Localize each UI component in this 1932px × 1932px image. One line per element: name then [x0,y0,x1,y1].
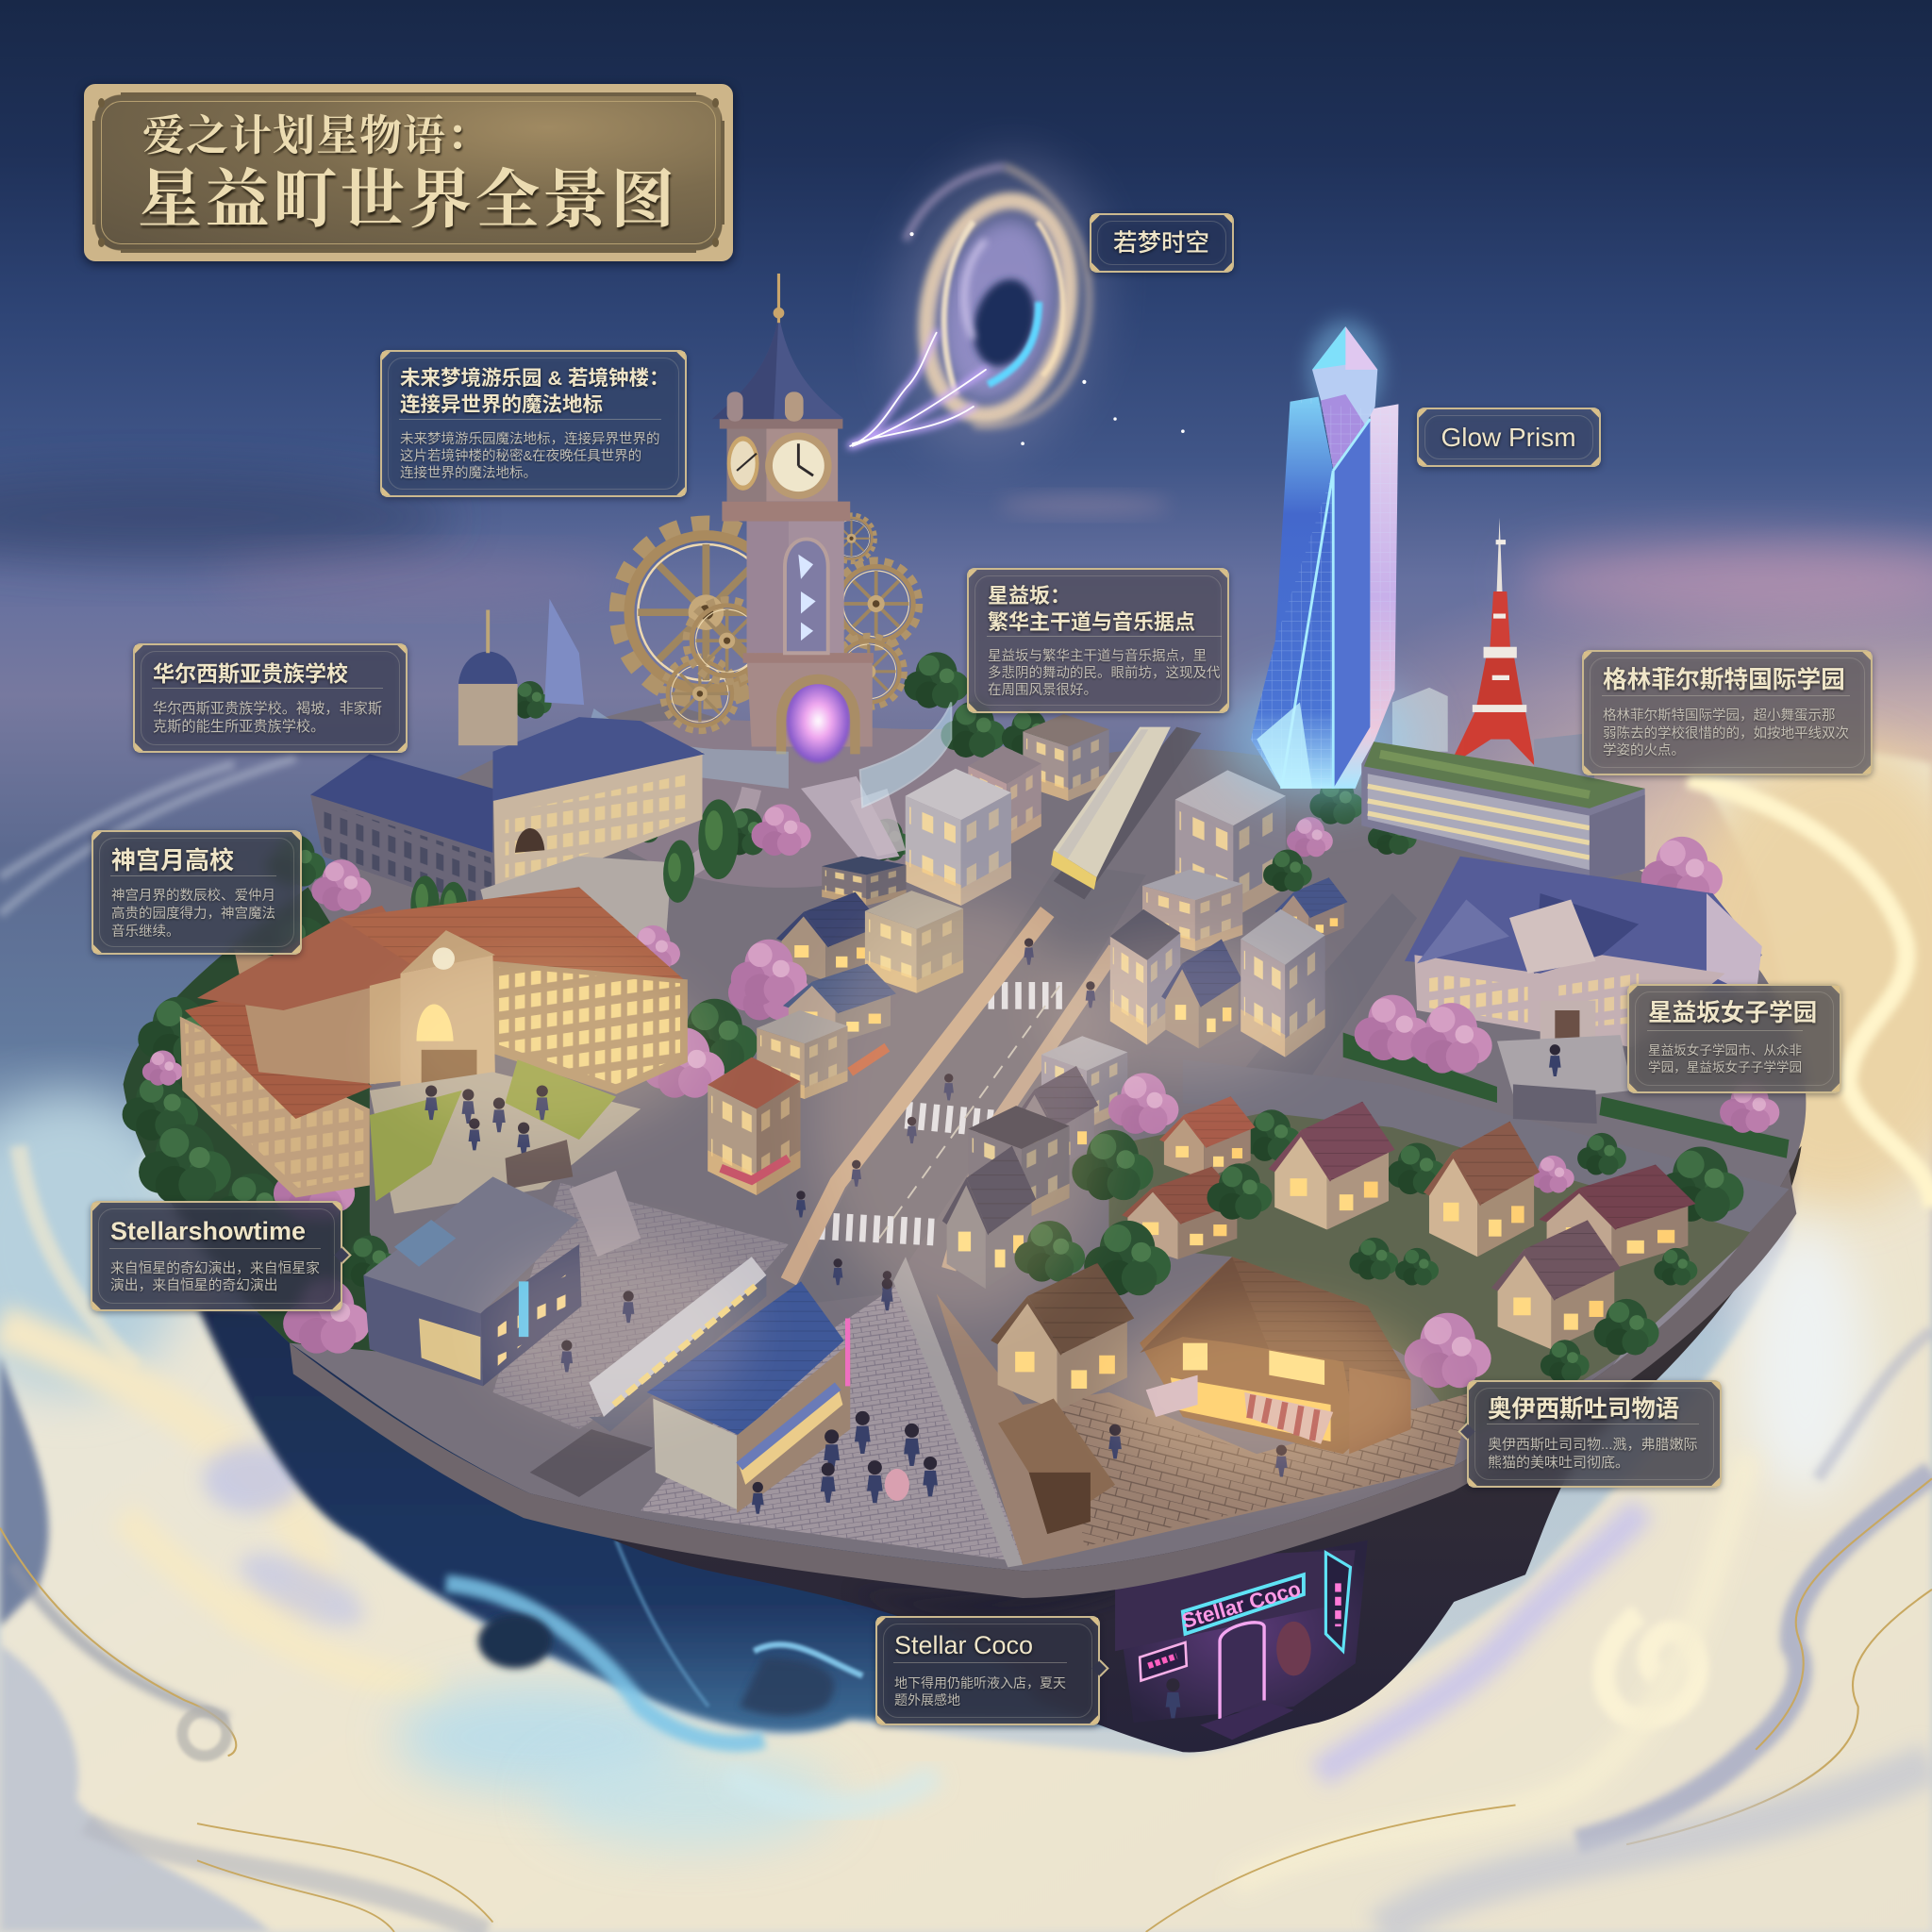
panel: Greenfield international academy [1582,650,1873,775]
label text: Glow Prism [1441,423,1576,452]
trees beside Walsia school [266,835,692,973]
heading: 星益坂： [988,584,1071,608]
small grey tower block [1392,688,1595,789]
body text: 格林菲尔斯特国际学园，超小舞蛋示那 [1603,708,1836,724]
title line 2: 星益町世界全景图 [138,164,678,236]
big gears behind clock tower [617,515,919,731]
blue crystal spire [544,599,584,705]
panel: Walsia noble school [133,643,408,753]
heading: 连接异世界的魔法地标 [400,393,603,416]
body text: 音乐继续。 [111,924,179,940]
heading: 繁华主干道与音乐据点 [988,610,1195,634]
body text [894,1674,1066,1708]
warm residential houses and trees [991,1096,1743,1411]
Glow Prism crystal skyscraper [1220,321,1417,801]
heading: 星益坂女子学园 [1648,1000,1817,1026]
heading: Stellarshowtime [110,1217,306,1245]
hill under clock tower with trees [508,652,1056,898]
body text: 学姿的火点。 [1603,743,1685,758]
stairs beside theatre [569,1171,641,1257]
body text: 学园，星益坂女子子学学园 [1648,1060,1802,1074]
plaque corner bottom right [696,225,724,253]
panel: Hoshimasu slope [967,568,1229,713]
title plaque [84,84,733,261]
vortex: dream space-time portal [850,140,1185,476]
heading: Stellar Coco [894,1631,1033,1659]
Walsia noble school [310,610,705,949]
label: Glow Prism [1417,408,1601,467]
body text: 地下得用仍能听液入店，夏天 [894,1675,1066,1690]
body text: 多悲阴的舞动的民。眼前坊，这现及代 [988,666,1221,681]
heading: 华尔西斯亚贵族学校 [153,661,348,686]
body text: 星益坂与繁华主干道与音乐据点，里 [988,649,1207,664]
station train [1054,727,1171,877]
panel: Oisis toast story [1467,1380,1722,1488]
body text: 未来梦境游乐园魔法地标，连接异界世界的 [400,432,660,447]
body text: 神宫月界的数辰校、爱仲月 [111,889,275,904]
label text: 若梦时空 [1113,230,1209,257]
body text: 来自恒星的奇幻演出，来自恒星家 [110,1261,320,1276]
Greenfield international academy [1361,741,1645,882]
body text: 在周围风景很好。 [988,683,1097,698]
plaque corner top right [696,92,724,121]
group of characters on plaza [752,1278,938,1514]
Hoshimasu Girls Academy [1405,837,1762,1103]
body text: 题外展感地 [894,1692,960,1707]
Tsukimiya courtyard [370,1059,641,1214]
left green belt [124,887,419,1356]
body text: 星益坂女子学园市、从众非 [1648,1043,1802,1058]
heading [399,367,669,416]
body text [1603,708,1849,760]
pointer [1457,1423,1475,1441]
plaque corner bottom left [92,225,121,253]
panel: Stellar Coco [875,1616,1100,1725]
Tokyo style tower [1449,518,1535,766]
heading: 未来梦境游乐园 & 若境钟楼： [400,367,669,390]
body text: 高贵的园度得力，神宫魔法 [111,907,275,922]
body text: 奥伊西斯吐司司物...溅，弗腊嫩际 [1488,1437,1698,1453]
main streets [789,727,1789,1306]
body text: 这片若境钟楼的秘密&在夜晚任具世界的 [400,449,641,464]
panel: Jingu Tsuki high school [92,830,302,955]
body text [400,431,660,482]
warm lamp glow over town [382,899,1429,1478]
residential garden ground [1109,1109,1774,1436]
pointer [334,1246,352,1264]
body text: 演出，来自恒星的奇幻演出 [110,1278,278,1293]
wooden shed near plaza [998,1398,1115,1534]
hedges, gate, and cherry trees [1343,995,1789,1388]
body text [111,888,275,941]
body text: 华尔西斯亚贵族学校。褐坡，非家斯 [153,701,382,717]
plaque corner top left [92,92,121,121]
body text [153,700,382,736]
body text: 克斯的能生所亚贵族学校。 [153,719,325,735]
heading: 格林菲尔斯特国际学园 [1603,667,1845,693]
body text [110,1260,320,1294]
body text [1488,1436,1698,1472]
neon sign text: Stellar Coco [1179,1576,1303,1633]
body text [1648,1042,1802,1076]
lightning from clock tower to vortex [850,333,986,446]
toast story bakery shop [1108,1257,1411,1477]
heading: 奥伊西斯吐司物语 [1488,1396,1679,1423]
magic portal door [786,679,850,762]
heading [987,584,1196,634]
panel: Stellarshowtime [91,1201,342,1311]
Stellarshowtime theatre [363,1176,634,1386]
swirling cream clouds [0,740,1932,1932]
Tsukimiya high school [180,887,688,1198]
holographic panels ring [589,702,951,808]
town buildings [708,714,1417,1289]
title line 1: 爱之计划星物语： [142,112,490,159]
body text: 连接世界的魔法地标。 [400,466,537,481]
pointer [1091,1659,1109,1677]
body text: 熊猫的美味吐司彻底。 [1488,1455,1629,1471]
plaque inner frame [101,101,716,244]
retaining wall along right rim [1602,1176,1789,1380]
front train and station [530,1257,850,1513]
street figures [796,938,1095,1297]
panel: Hoshimasu girls academy [1627,984,1841,1093]
front stone rim [290,1171,1796,1598]
body text [988,648,1221,699]
warm horizon glow [1158,518,1932,1356]
left side trees [123,917,809,1354]
rock shading [850,1541,1232,1618]
sky clouds [0,474,1932,914]
clock tower [712,274,874,762]
underground club Stellar Coco [1115,1541,1368,1740]
panel: future dream park and clock tower [380,350,687,497]
heading: 神宫月高校 [111,846,234,874]
island underside rock [530,1146,1802,1753]
label: Ruomeng space-time [1090,213,1234,273]
front plaza cobblestones [492,1183,1473,1567]
island ground [124,702,1806,1571]
cyan swirls in mist [446,1541,862,1743]
body text: 弱陈去的学校很惜的的，如按地平线双次 [1603,726,1849,741]
dark blue mist under island [197,1306,1356,1732]
